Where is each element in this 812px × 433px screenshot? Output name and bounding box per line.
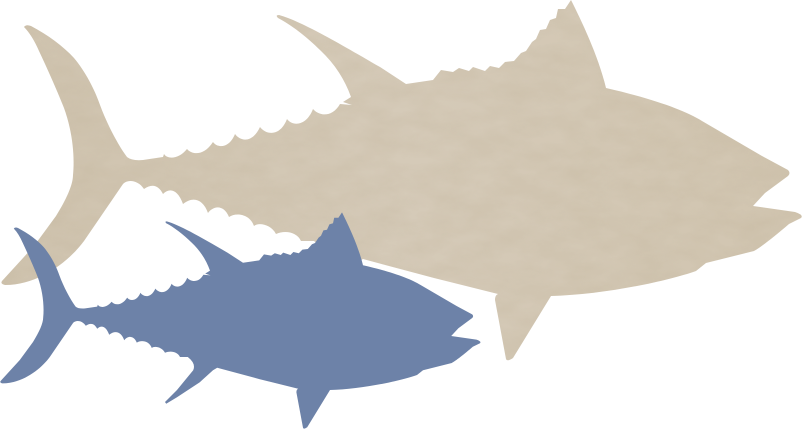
small tuna silhouette (blue) [0, 212, 480, 429]
